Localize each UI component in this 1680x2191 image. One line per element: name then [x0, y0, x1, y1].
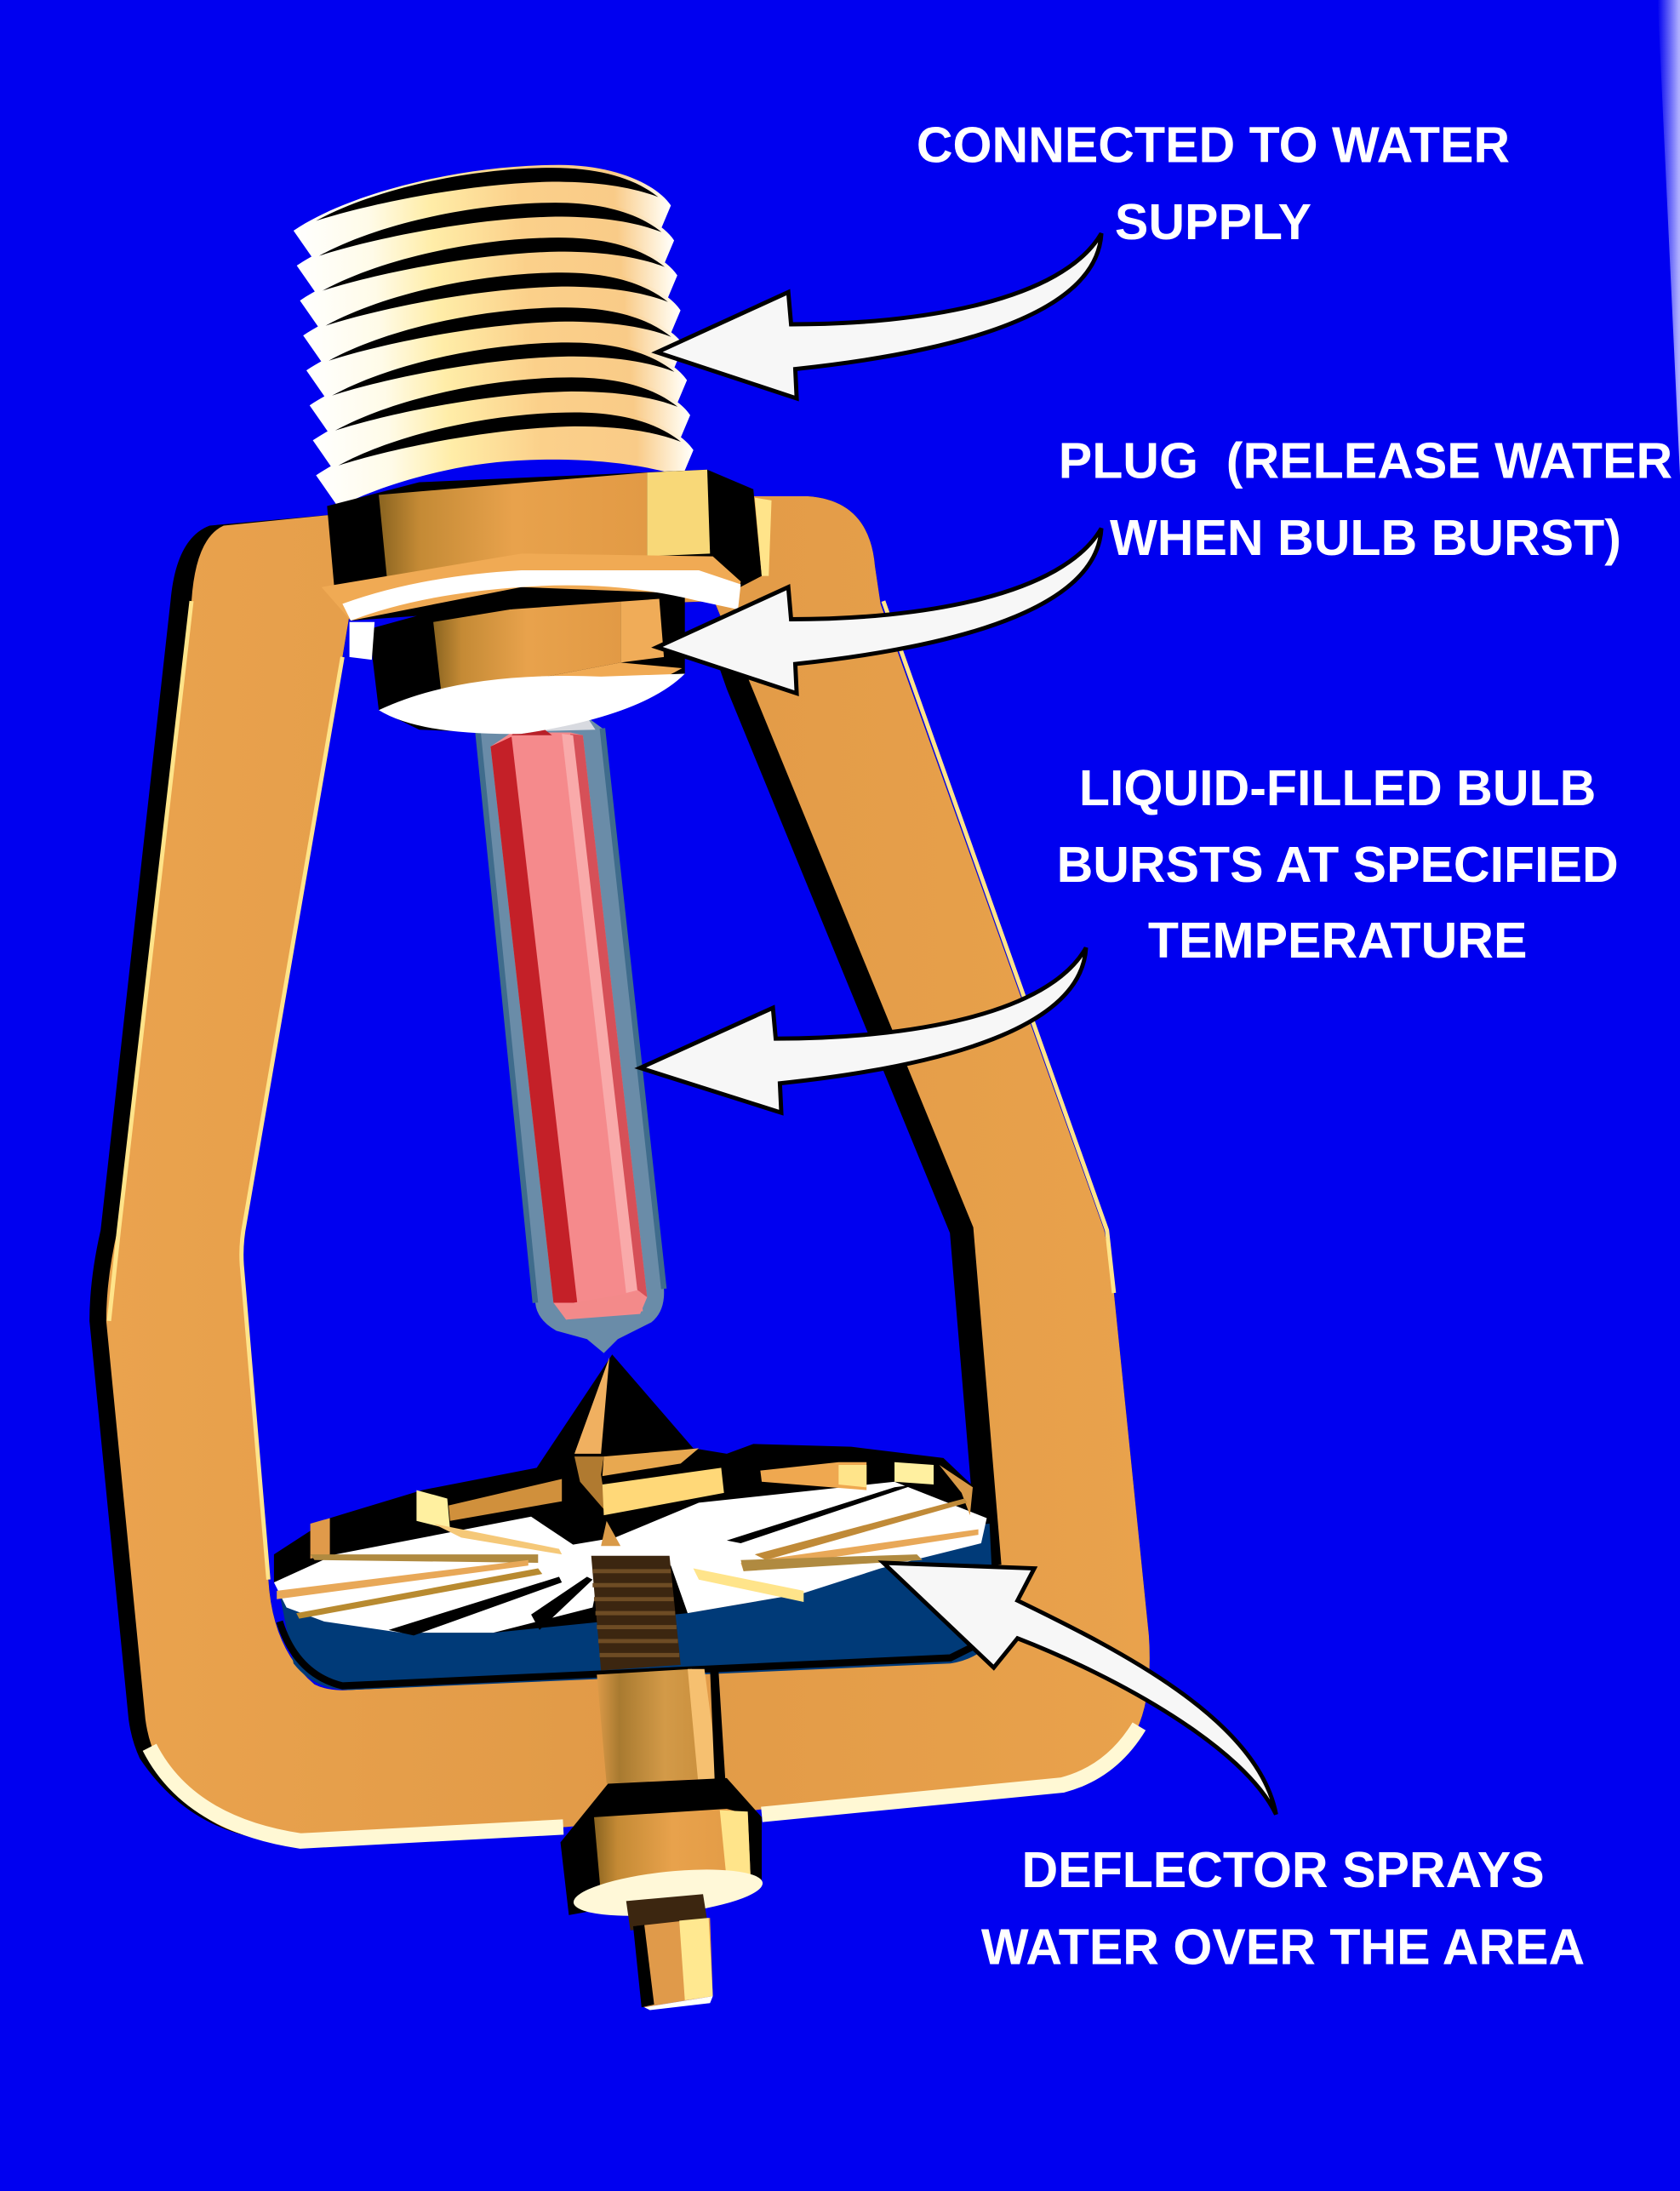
threads	[294, 165, 694, 507]
lower nut (plug)	[350, 587, 685, 734]
right edge highlight	[1658, 0, 1680, 475]
plate lower rim	[279, 1622, 979, 1686]
deflector bottom plate	[277, 1524, 995, 1690]
arrow: plug	[657, 529, 1101, 694]
arrow: water supply	[657, 233, 1101, 398]
label: bulb: TEMPERATURE	[1148, 912, 1527, 969]
label: plug: WHEN BULB BURST)	[1110, 509, 1621, 566]
label: bulb: LIQUID-FILLED BULB	[1079, 759, 1596, 816]
deflector	[274, 1354, 986, 1635]
label: water supply: SUPPLY	[1115, 193, 1311, 250]
collar nut	[322, 470, 772, 621]
glass bulb	[478, 717, 664, 1353]
pin	[626, 1894, 713, 2010]
label: deflector: WATER OVER THE AREA	[981, 1918, 1585, 1975]
label: bulb: BURSTS AT SPECIFIED	[1057, 836, 1619, 893]
stem	[597, 1669, 727, 1803]
frame	[89, 496, 1150, 1842]
deflector screw	[591, 1556, 681, 1670]
label: deflector: DEFLECTOR SPRAYS	[1021, 1841, 1545, 1898]
arrow: bulb	[640, 947, 1086, 1113]
arrow: deflector	[883, 1563, 1276, 1815]
bottom cap	[561, 1778, 765, 1924]
label: water supply: CONNECTED TO WATER	[917, 116, 1510, 173]
label: plug: PLUG (RELEASE WATER	[1059, 432, 1672, 489]
